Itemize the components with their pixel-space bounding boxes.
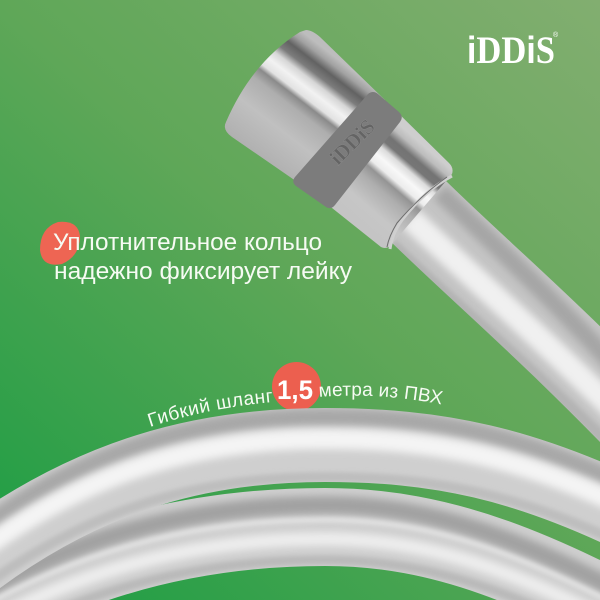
sealing ring [293, 92, 402, 208]
curved caption: hose: метра из ПВХ [320, 386, 443, 404]
collar between nut and pipe [390, 176, 452, 249]
caption: sealing ring [53, 229, 352, 285]
curved caption: hose [148, 386, 443, 426]
lower hose coil [0, 480, 600, 600]
caption: sealing ring: Уплотнительное кольцо [53, 229, 322, 256]
metal pipe of the hose [392, 181, 600, 442]
red circle behind 1,5 [272, 362, 321, 411]
ring engraved logo: iDDiS [325, 114, 380, 170]
curved caption: hose: Гибкий шланг [148, 392, 272, 426]
upper hose coil [0, 400, 600, 600]
rear section of nut [322, 105, 453, 248]
logo: iddis: ® [553, 31, 559, 39]
logo: iddis: iDDiS [467, 29, 555, 72]
red accent blob behind caption [40, 222, 80, 265]
hose length number: 1,5 [277, 375, 313, 405]
caption: sealing ring: надежно фиксирует лейку [54, 258, 352, 285]
hose head: shower connector nut [225, 30, 453, 249]
front section of nut [225, 30, 385, 215]
